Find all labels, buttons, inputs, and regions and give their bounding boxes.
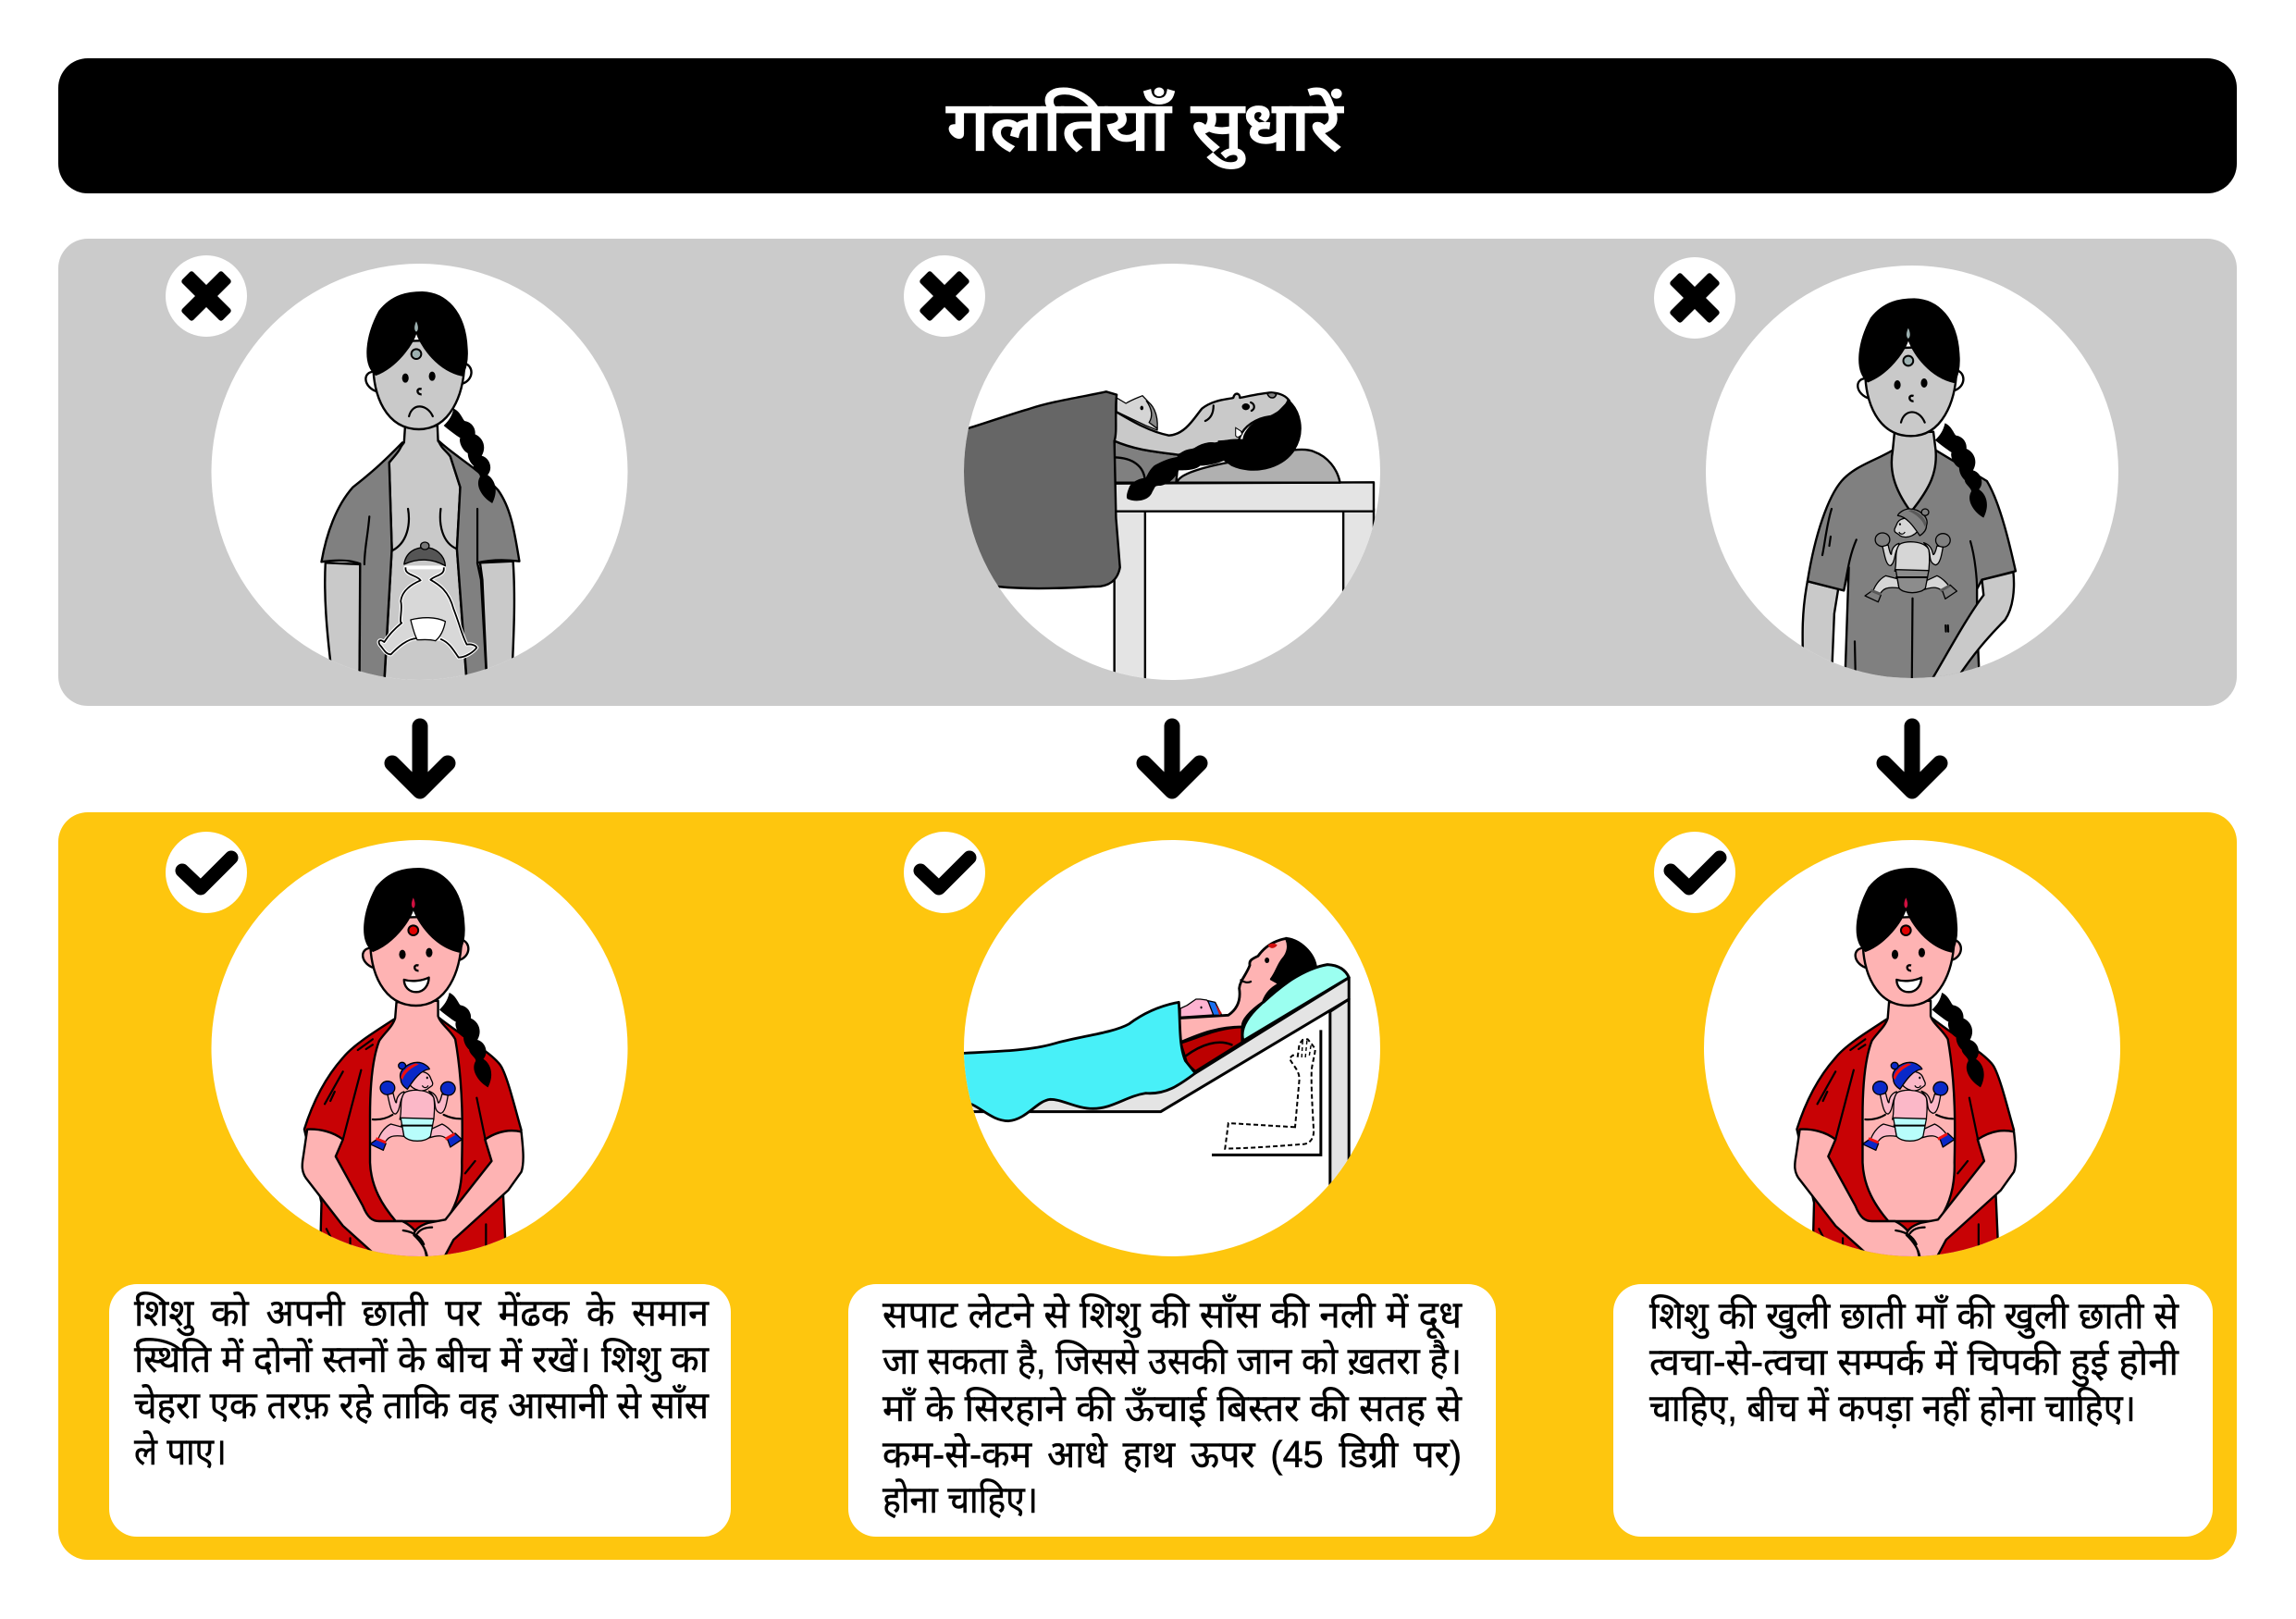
text box 2: माँ के सिरहाने की ऊँचाई बिस्तर की सतह से [883, 1387, 1463, 1429]
title text: गलतियाँ सुधारें [944, 87, 1345, 169]
correction 1: baby between breasts [211, 840, 627, 1267]
title bar [58, 58, 2237, 193]
text box 2 [848, 1284, 1496, 1537]
text box 3: त्वचा-से-त्वचा सम्पर्क में चिपकी हुई होनी [1649, 1341, 2179, 1387]
badge: correct 2 [904, 832, 985, 913]
correction 2: head raised 45 degrees [947, 840, 1380, 1256]
mistake 1: baby on bare chest incorrectly placed [211, 264, 627, 685]
text box 2: होना चाहिए। [883, 1478, 1038, 1521]
badge: wrong 2 [904, 255, 985, 337]
baby [1865, 509, 1957, 602]
panel: corrections [58, 812, 2237, 1560]
correction 3: skin to skin [1704, 840, 2120, 1267]
panel: mistakes [58, 239, 2237, 706]
text box 1: चेहरा एक तरफ़ रहे ताकि वह आसानी से साँस [134, 1384, 710, 1427]
text box 2: कम-से-कम आधे हाथ ऊपर (45 डिग्री पर) [883, 1433, 1462, 1476]
baby [370, 1062, 462, 1150]
badge: wrong 3 [1654, 257, 1735, 339]
baby [379, 542, 476, 658]
badge: wrong 1 [166, 255, 247, 337]
mistake 3: baby over clothes [1706, 266, 2118, 685]
arrow 2 [1144, 726, 1200, 791]
badge: correct 1 [166, 832, 247, 913]
text box 2: जा सकता है, जिससे उसकी जान को ख़तरा है। [883, 1340, 1462, 1382]
arrow 1 [392, 726, 448, 791]
badge: correct 3 [1654, 832, 1735, 913]
baby [1862, 1062, 1955, 1150]
text box 1: ले पाए। [134, 1430, 227, 1473]
text box 2: सपाट लेटने से शिशु की साँस की नली में दूध [883, 1293, 1463, 1340]
text box 3: चाहिए, बीच में कपड़ा नहीं होना चाहिए। [1649, 1387, 2136, 1429]
arrow 3 [1884, 726, 1940, 791]
text box 3: शिशु की खुली छाती माँ की खुली छाती से [1649, 1294, 2179, 1339]
text box 1 [109, 1284, 731, 1537]
text box 1: स्थिति में दोनों स्तनों के बीच में रखें। शिशु का [134, 1338, 710, 1382]
text box 1: शिशु को अपनी छाती पर मेंढक के समान [134, 1291, 710, 1336]
mistake 2: lying flat [947, 264, 1380, 687]
text box 3 [1613, 1284, 2213, 1537]
